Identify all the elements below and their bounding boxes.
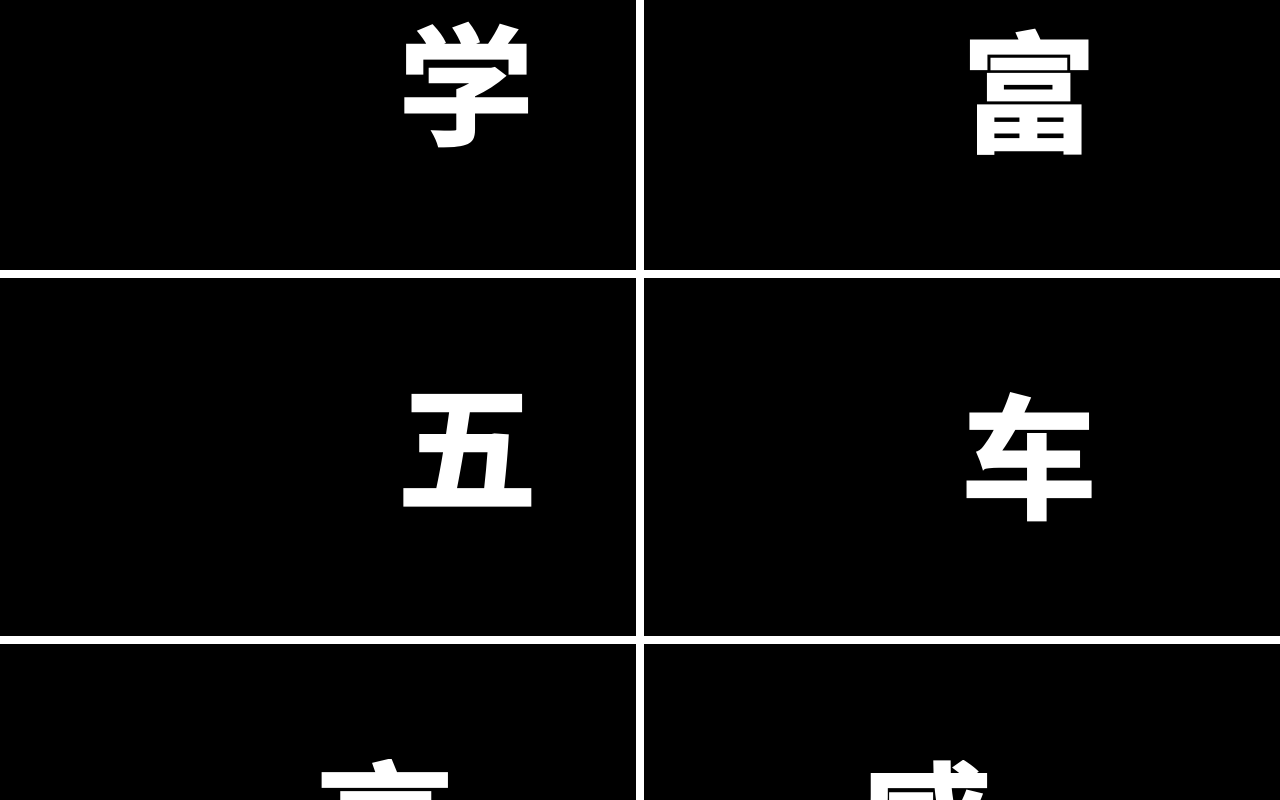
character: 富: 富 — [961, 24, 1097, 170]
panel: middle right — [644, 278, 1280, 636]
character: 车: 车 — [961, 387, 1097, 537]
character: 五: 五 — [397, 375, 537, 529]
panel: bottom right — [644, 644, 1280, 800]
panel: top right — [644, 0, 1280, 270]
panel: middle left — [0, 278, 636, 636]
character: 学: 学 — [398, 16, 534, 163]
panel: bottom left — [0, 644, 636, 800]
panel: top left — [0, 0, 636, 270]
